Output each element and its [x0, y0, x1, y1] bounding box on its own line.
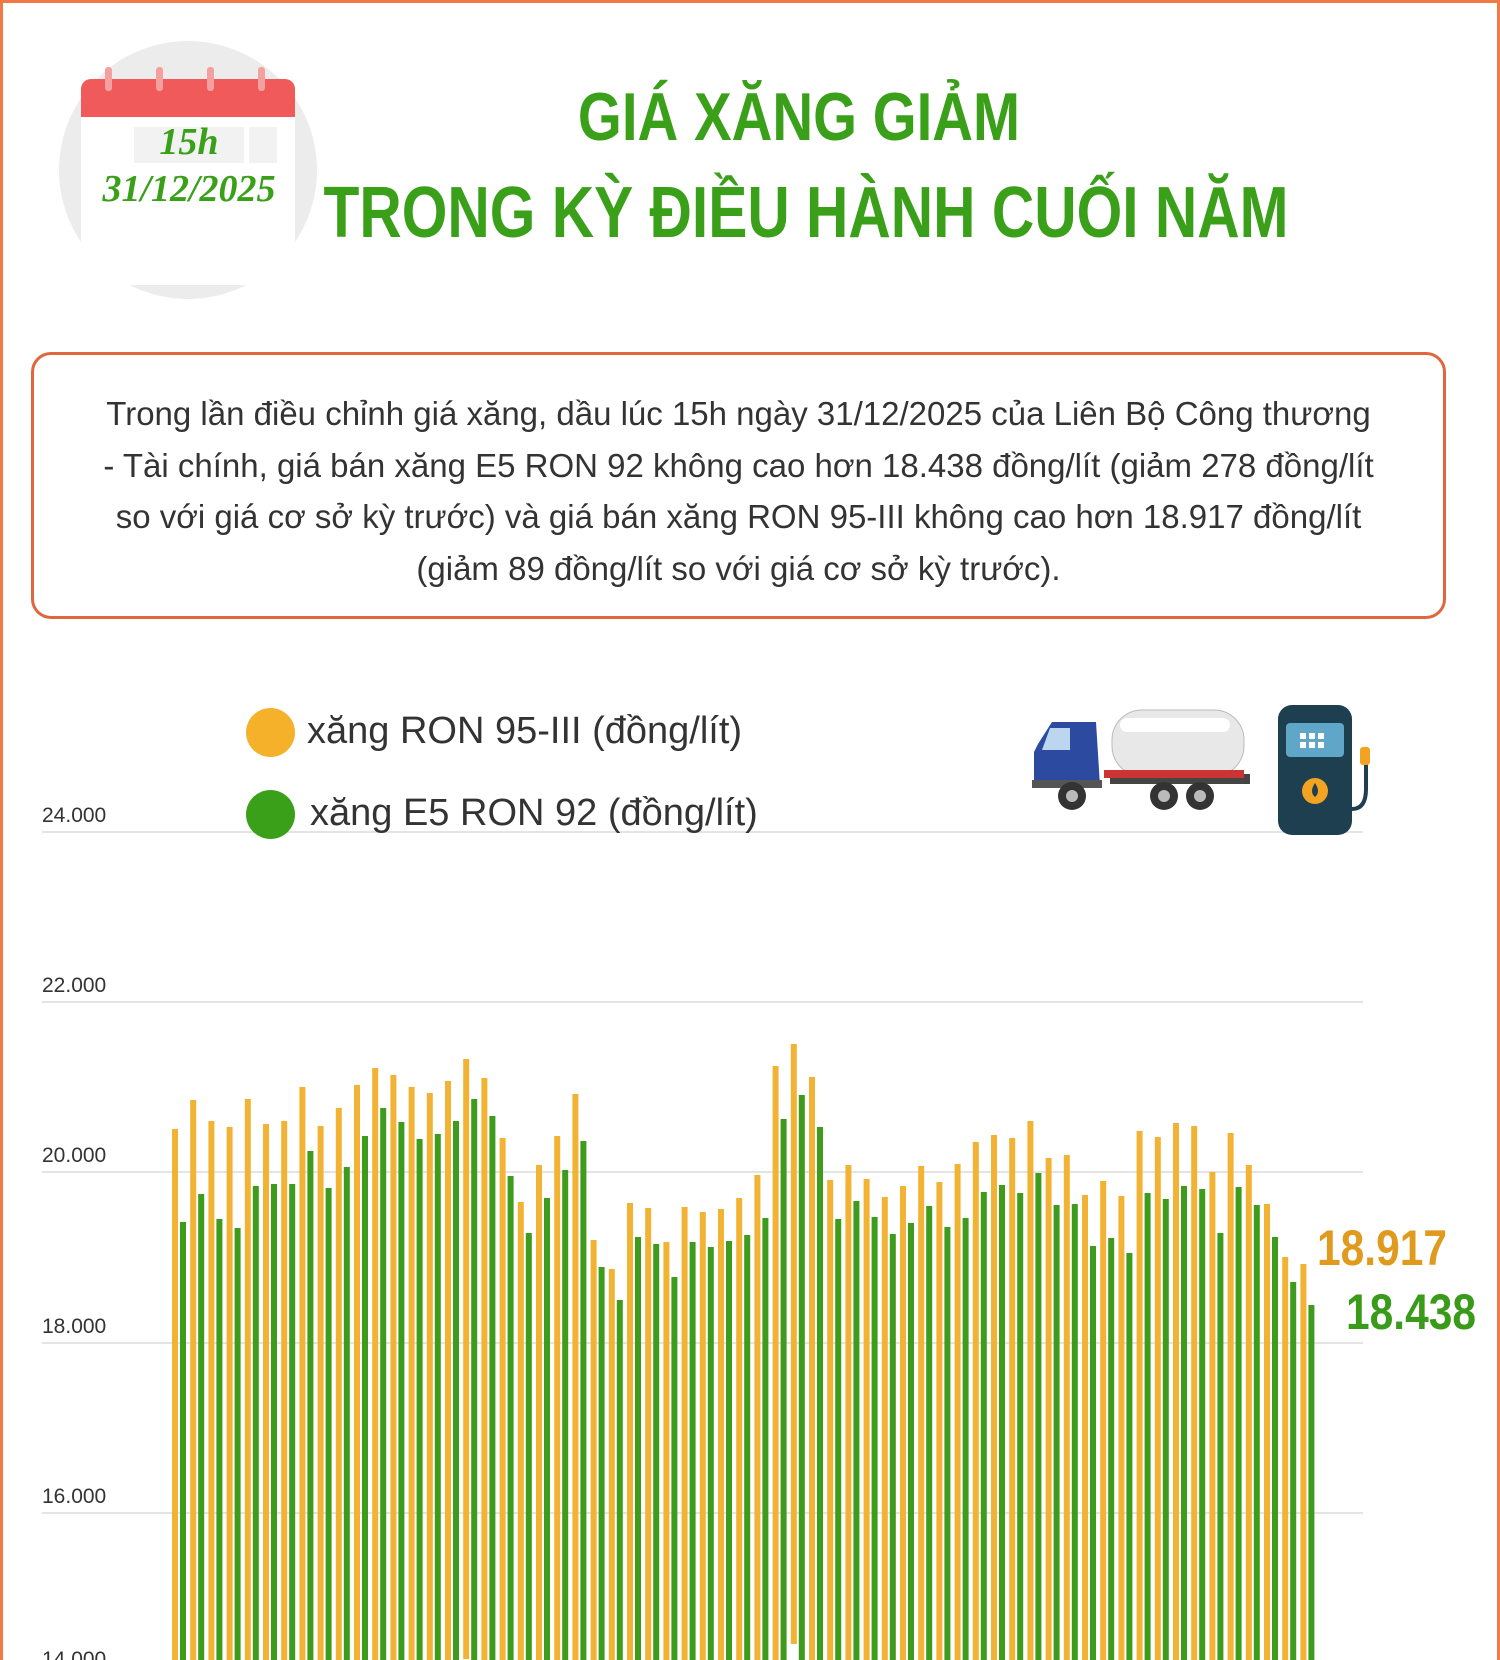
- text box: summary: Trong lần điều chỉnh giá xăng, dầu lúc 15h ngày 31/12/2025 của Liên Bộ Công thương: [106, 395, 1371, 432]
- text box: summary: [31, 352, 1446, 619]
- legend: RON 95-III: xăng RON 95-III (đồng/lít): [307, 710, 742, 752]
- axis labels: 24.000: [42, 804, 106, 827]
- axis labels: [42, 804, 106, 1660]
- icon: calendar date: 31/12/2025: [102, 168, 276, 210]
- title line 2: TRONG KỲ ĐIỀU HÀNH CUỐI NĂM: [324, 173, 1288, 253]
- text box: summary: so với giá cơ sở kỳ trước) và giá bán xăng RON 95-III không cao hơn 18.917 đồng/lít: [116, 498, 1361, 535]
- text box: summary: - Tài chính, giá bán xăng E5 RON 92 không cao hơn 18.438 đồng/lít (giảm 278 đồng/lít: [103, 446, 1374, 484]
- axis labels: 16.000: [42, 1485, 106, 1508]
- icon: tanker truck: [1032, 710, 1250, 810]
- axis labels: 20.000: [42, 1144, 106, 1167]
- icon: calendar date: [59, 41, 317, 299]
- axis labels: 22.000: [42, 974, 106, 997]
- icon: fuel pump: [1278, 705, 1370, 835]
- legend: E5 RON 92: xăng E5 RON 92 (đồng/lít): [310, 792, 758, 834]
- text box: summary: (giảm 89 đồng/lít so với giá cơ sở kỳ trước).: [416, 550, 1061, 586]
- value label: RON 95-III: 18.917: [1317, 1220, 1447, 1276]
- icon: calendar date: 15h: [159, 121, 219, 163]
- axis labels: 18.000: [42, 1315, 106, 1338]
- value label: E5 RON 92: 18.438: [1346, 1284, 1476, 1340]
- title line 1: GIÁ XĂNG GIẢM: [578, 79, 1020, 155]
